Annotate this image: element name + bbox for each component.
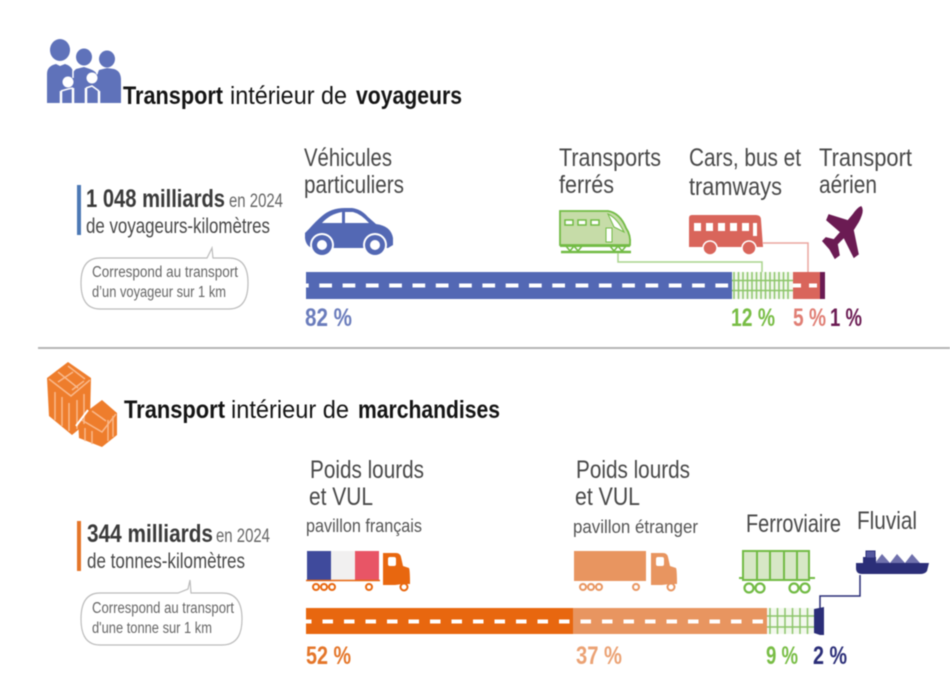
key figure: tonnes-kilomètres: en 2024 bbox=[216, 526, 270, 547]
percentages: marchandises: 9 % bbox=[766, 642, 798, 670]
label: cars, bus et tramways: Cars, bus et bbox=[689, 144, 801, 172]
percentages: marchandises bbox=[306, 642, 847, 670]
label: transports ferrés bbox=[559, 144, 661, 199]
label: transport aérien: Transport bbox=[819, 144, 912, 172]
heading: marchandises: intérieur de bbox=[231, 396, 349, 424]
callout: définition tonne-kilomètre bbox=[81, 580, 242, 645]
label: transport aérien: aérien bbox=[819, 171, 877, 199]
icon: plane bbox=[823, 207, 862, 258]
heading: voyageurs: Transport bbox=[123, 82, 224, 110]
callout: définition tonne-kilomètre: Correspond au transport bbox=[92, 600, 235, 617]
percentages: voyageurs bbox=[305, 304, 862, 332]
label: véhicules particuliers: particuliers bbox=[304, 171, 404, 199]
icon: barge bbox=[856, 551, 929, 574]
heading: voyageurs: intérieur de bbox=[230, 82, 347, 110]
icon: car bbox=[305, 208, 393, 257]
heading: marchandises bbox=[124, 396, 500, 424]
label: poids lourds pavillon étranger bbox=[573, 456, 698, 537]
callout: définition voyageur-kilomètre bbox=[81, 248, 248, 309]
label: véhicules particuliers: Véhicules bbox=[304, 144, 392, 172]
callout: définition voyageur-kilomètre: Correspond au transport bbox=[92, 264, 239, 281]
heading: marchandises: marchandises bbox=[358, 396, 500, 424]
key figure: voyageurs-kilomètres: 1 048 milliards bbox=[86, 185, 225, 213]
label: transports ferrés: ferrés bbox=[559, 171, 614, 199]
percentages: voyageurs: 12 % bbox=[731, 304, 775, 332]
key figure: voyageurs-kilomètres: en 2024 bbox=[229, 191, 283, 212]
icon: stacked parcels bbox=[47, 362, 117, 447]
percentages: voyageurs: 5 % bbox=[793, 304, 826, 332]
bar: parts modales marchandises bbox=[306, 607, 824, 635]
heading: voyageurs: voyageurs bbox=[356, 82, 462, 110]
key figure: tonnes-kilomètres: 344 milliards bbox=[87, 520, 213, 548]
label: cars, bus et tramways bbox=[689, 144, 801, 201]
callout: définition voyageur-kilomètre: d’un voyageur sur 1 km bbox=[92, 284, 226, 301]
key figure: tonnes-kilomètres: de tonnes-kilomètres bbox=[87, 550, 245, 573]
icon: bus bbox=[689, 215, 763, 255]
label: poids lourds pavillon français: et VUL bbox=[309, 483, 373, 511]
icon: family of people bbox=[47, 39, 121, 103]
label: véhicules particuliers bbox=[304, 144, 404, 199]
label: poids lourds pavillon français: pavillon français bbox=[306, 516, 422, 536]
key figure: voyageurs-kilomètres: de voyageurs-kilomètres bbox=[86, 215, 270, 238]
percentages: voyageurs: 1 % bbox=[830, 304, 862, 332]
percentages: marchandises: 37 % bbox=[576, 642, 622, 670]
label: poids lourds pavillon français bbox=[306, 456, 424, 536]
percentages: marchandises: 52 % bbox=[306, 642, 351, 670]
percentages: voyageurs: 82 % bbox=[305, 304, 352, 332]
icon: truck with French flag bbox=[306, 551, 410, 590]
heading: voyageurs bbox=[123, 82, 462, 110]
label: transport aérien bbox=[819, 144, 912, 199]
label: poids lourds pavillon étranger: et VUL bbox=[575, 483, 640, 511]
connector: barge to bar bbox=[820, 575, 860, 609]
callout: définition tonne-kilomètre: d'une tonne sur 1 km bbox=[92, 620, 212, 637]
label: poids lourds pavillon français: Poids lourds bbox=[310, 456, 424, 484]
panel: transport de marchandises bbox=[47, 362, 929, 670]
connector: train to rail segment bbox=[618, 253, 762, 272]
label: fluvial: Fluvial bbox=[857, 507, 917, 535]
connector: bus to road segment bbox=[763, 243, 808, 272]
label: poids lourds pavillon étranger: pavillon étranger bbox=[573, 517, 698, 537]
percentages: marchandises: 2 % bbox=[813, 642, 847, 670]
key figure: voyageurs-kilomètres bbox=[77, 185, 283, 238]
label: cars, bus et tramways: tramways bbox=[689, 173, 782, 201]
label: poids lourds pavillon étranger: Poids lourds bbox=[576, 456, 690, 484]
heading: marchandises: Transport bbox=[124, 396, 226, 424]
label: ferroviaire: Ferroviaire bbox=[746, 510, 841, 538]
icon: truck foreign flag bbox=[574, 551, 677, 590]
panel: transport de voyageurs bbox=[47, 39, 912, 332]
icon: freight wagon bbox=[739, 551, 815, 592]
label: transports ferrés: Transports bbox=[559, 144, 661, 172]
icon: train bbox=[560, 211, 631, 252]
key figure: tonnes-kilomètres bbox=[77, 520, 270, 573]
bar: parts modales voyageurs bbox=[306, 272, 825, 299]
